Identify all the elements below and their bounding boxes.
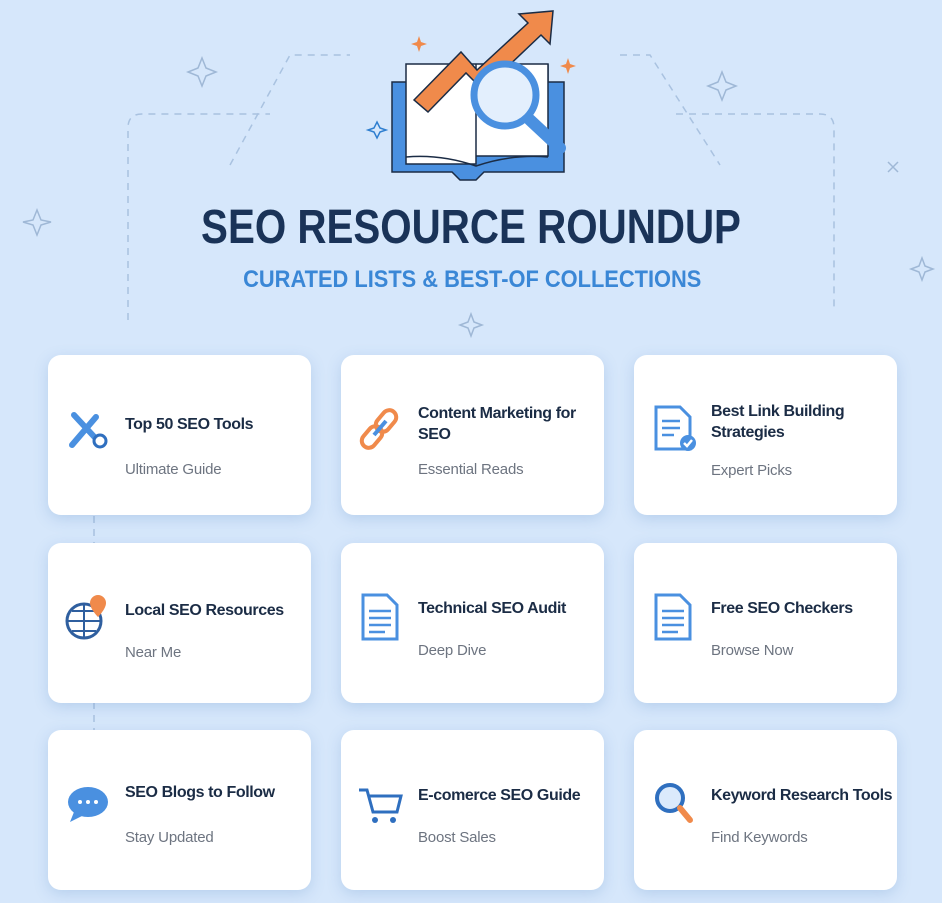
title: SEO RESOURCE ROUNDUP bbox=[201, 201, 741, 254]
card: E-commerce: Boost Sales bbox=[418, 829, 496, 846]
card: Technical SEO: Technical SEO Audit bbox=[418, 600, 566, 617]
card: Content Marketing: Content Marketing for bbox=[418, 405, 576, 422]
card: Content Marketing bbox=[341, 355, 604, 515]
icon: document check bbox=[654, 406, 696, 451]
card: Free SEO Checkers bbox=[634, 543, 897, 703]
card: Content Marketing: Essential Reads bbox=[418, 461, 523, 478]
card: Local SEO: Local SEO Resources bbox=[125, 602, 284, 619]
card: Link Building: Best Link Building bbox=[711, 403, 844, 420]
card: Top 50 SEO Tools bbox=[48, 355, 311, 515]
icon: document bbox=[362, 594, 398, 640]
card: Top 50 SEO Tools: Ultimate Guide bbox=[125, 461, 221, 478]
card: E-commerce: E-comerce SEO Guide bbox=[418, 787, 580, 804]
icon: chat bubble bbox=[68, 787, 108, 822]
card: Link Building bbox=[634, 355, 897, 515]
card: Top 50 SEO Tools: Top 50 SEO Tools bbox=[125, 416, 253, 433]
icon: chain link bbox=[360, 408, 398, 450]
card: Free SEO Checkers: Free SEO Checkers bbox=[711, 600, 853, 617]
card: Technical SEO bbox=[341, 543, 604, 703]
icon: document bbox=[654, 594, 692, 640]
card: Link Building: Strategies bbox=[711, 424, 784, 441]
card: Technical SEO: Deep Dive bbox=[418, 642, 486, 659]
card: Keyword Research: Find Keywords bbox=[711, 829, 808, 846]
card: Link Building: Expert Picks bbox=[711, 462, 792, 479]
card: Content Marketing: SEO bbox=[418, 426, 451, 443]
card: E-commerce bbox=[341, 730, 604, 890]
card: Local SEO bbox=[48, 543, 311, 703]
icon: wrench bbox=[69, 412, 108, 448]
card: Keyword Research bbox=[634, 730, 897, 890]
card: Free SEO Checkers: Browse Now bbox=[711, 642, 793, 659]
card: Local SEO: Near Me bbox=[125, 644, 181, 661]
icon: hero book with chart and magnifier bbox=[366, 10, 576, 181]
card: SEO Blogs bbox=[48, 730, 311, 890]
subtitle: CURATED LISTS & BEST-OF COLLECTIONS bbox=[243, 266, 701, 293]
card: SEO Blogs: Stay Updated bbox=[125, 829, 214, 846]
card: SEO Blogs: SEO Blogs to Follow bbox=[125, 784, 275, 801]
icon: magnifier bbox=[655, 783, 693, 823]
icon: globe pin bbox=[66, 595, 106, 640]
card: Keyword Research: Keyword Research Tools bbox=[711, 787, 892, 804]
icon: cart bbox=[359, 788, 403, 823]
